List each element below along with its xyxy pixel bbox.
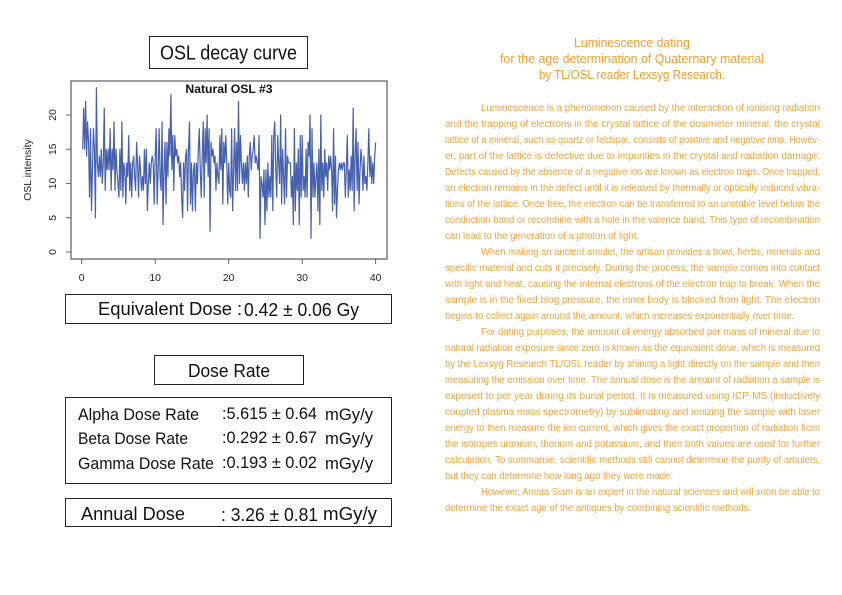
text block: paragraph 4: However, Amata Siam is an expert in the natural sciences and will soon be able to xyxy=(481,487,820,498)
y axis ticks and numbers: 20 xyxy=(48,109,59,121)
row: gamma dose rate xyxy=(78,453,373,473)
panel: dose rates table xyxy=(66,398,392,484)
text block: paragraph 1: Luminescence is a phenomenon caused by the interaction of ionising radiation xyxy=(481,103,820,114)
text block: paragraph 3 xyxy=(445,327,821,482)
text block: paragraph 2: sample is in the fixed blog pressure, the inner body is blocked from light. The electron xyxy=(445,295,820,306)
text block: paragraph 4 xyxy=(445,487,820,514)
x axis ticks and numbers: 20 xyxy=(223,273,235,284)
y axis label: OSL intensity xyxy=(23,138,34,201)
text block: paragraph 1 xyxy=(445,103,820,242)
text block: paragraph 3: coupled plasma mass spectrometry) by sublimating and ionizing the sample with laser xyxy=(445,407,821,418)
x axis ticks and numbers: 10 xyxy=(149,273,161,284)
text block: paragraph 1: Defects caused by the absence of a negative ion are known as electron traps. Once trapped, xyxy=(445,167,820,178)
title: luminescence dating: by TL/OSL reader Lexsyg Research. xyxy=(539,67,725,82)
x axis ticks and numbers: 40 xyxy=(370,273,382,284)
row: beta dose rate: mGy/y xyxy=(325,429,373,448)
y axis ticks and numbers: 5 xyxy=(48,215,59,221)
panel: annual dose: Annual Dose xyxy=(81,503,185,524)
text block: paragraph 3: by the Lexsyg Research TL/OSL reader by shining a light directly on the sample and then xyxy=(445,359,820,370)
y axis ticks and numbers: 15 xyxy=(48,143,59,155)
text block: paragraph 1: er, part of the lattice is defective due to impurities in the crystal and radiation damage. xyxy=(445,151,820,162)
panel: annual dose: mGy/y xyxy=(323,503,378,524)
row: alpha dose rate: :5.615 ± 0.64 xyxy=(222,404,317,423)
text block: paragraph 2: specific material and cuts it precisely. During the process, the sample comes into contact xyxy=(445,263,820,274)
title: luminescence dating: Luminescence dating xyxy=(574,35,690,50)
text block: paragraph 2: begins to collect again around the amount, which increases exponentially over time. xyxy=(445,311,794,322)
y axis ticks and numbers: 10 xyxy=(48,178,59,189)
row: gamma dose rate: mGy/y xyxy=(325,454,373,473)
row: gamma dose rate: :0.193 ± 0.02 xyxy=(222,453,317,472)
text block: paragraph 3: energy to then measure the ion current, which gives the exact proportion of radiation from xyxy=(445,423,820,434)
row: gamma dose rate: Gamma Dose Rate xyxy=(78,454,214,473)
text block: paragraph 2 xyxy=(444,247,820,322)
panel: equivalent dose: 0.42 ± 0.06 Gy xyxy=(244,299,360,320)
text block: paragraph 1: tions of the lattice. Once free, the electron can be transferred to an unstable level below the xyxy=(445,199,820,210)
text block: paragraph 3: natural radiation exposure since zero is known as the equivalent dose, which is measured xyxy=(445,343,820,354)
panel: annual dose xyxy=(66,498,392,526)
heading: OSL decay curve: OSL decay curve xyxy=(160,42,297,64)
row: alpha dose rate xyxy=(78,404,373,424)
title: luminescence dating: for the age determination of Quaternary material xyxy=(500,51,764,66)
heading: OSL decay curve xyxy=(150,36,308,68)
row: alpha dose rate: mGy/y xyxy=(325,405,373,424)
chart title: Natural OSL #3 xyxy=(185,82,273,96)
row: beta dose rate xyxy=(78,428,373,448)
row: alpha dose rate: Alpha Dose Rate xyxy=(78,405,199,424)
y axis ticks and numbers: 0 xyxy=(48,249,59,255)
text block: paragraph 2: When making an ancient amulet, the artisan provides a bowl, herbs, minerals and xyxy=(481,247,820,258)
heading: Dose Rate xyxy=(154,356,304,384)
x axis ticks and numbers: 0 xyxy=(79,273,85,284)
panel: equivalent dose: : xyxy=(237,298,242,319)
panel: annual dose: : 3.26 ± 0.81 xyxy=(221,504,318,525)
text block: paragraph 1: conduction band or recombine with a hole in the valence band. This type of recombination xyxy=(445,215,820,226)
text block: paragraph 1: and the trapping of electrons in the crystal lattice of the dosimeter mineral. the crystal xyxy=(445,119,820,130)
row: beta dose rate: :0.292 ± 0.67 xyxy=(222,428,317,447)
text block: paragraph 3: the isotopes uranium, thorium and potassium, and then both values are used for further xyxy=(445,439,821,450)
text block: paragraph 1: an electron remains in the defect until it is released by thermally or optically induced vibra- xyxy=(445,183,820,194)
row: beta dose rate: Beta Dose Rate xyxy=(78,429,188,448)
text block: paragraph 3: measuring the emission over time. The annual dose is the amount of radiation a sample is xyxy=(445,375,820,386)
heading: Dose Rate: Dose Rate xyxy=(188,360,270,381)
x axis ticks and numbers xyxy=(79,259,382,284)
text block: paragraph 4: determine the exact age of the antiques by combining scientific methods. xyxy=(445,503,751,514)
panel: equivalent dose xyxy=(66,294,392,324)
text block: paragraph 3: exposed to per year during its burial period. It is measured using ICP-MS (inductively xyxy=(445,391,820,402)
x axis ticks and numbers: 30 xyxy=(296,273,308,284)
y axis ticks and numbers xyxy=(48,109,71,255)
title: luminescence dating xyxy=(500,35,764,82)
data line xyxy=(83,88,376,238)
line chart: Natural OSL #3 xyxy=(23,81,387,284)
text block: paragraph 2: with light and heat, causing the internal electrons of the electron trap to break. When the xyxy=(444,279,820,290)
text block: paragraph 3: For dating purposes, the amount of energy absorbed per mass of mineral due to xyxy=(481,327,820,338)
text block: paragraph 3: but they can determine how long ago they were made. xyxy=(445,471,673,482)
text block: paragraph 1: lattice of a mineral, such as quartz or feldspar, consists of positive and negative ions. Howev- xyxy=(445,135,820,146)
panel: equivalent dose: Equivalent Dose xyxy=(98,298,232,319)
text block: paragraph 1: can lead to the generation of a photon of light. xyxy=(445,231,639,242)
text block: paragraph 3: calculation. To summarise, scientific methods still cannot determine the purity of amulets, xyxy=(445,455,820,466)
